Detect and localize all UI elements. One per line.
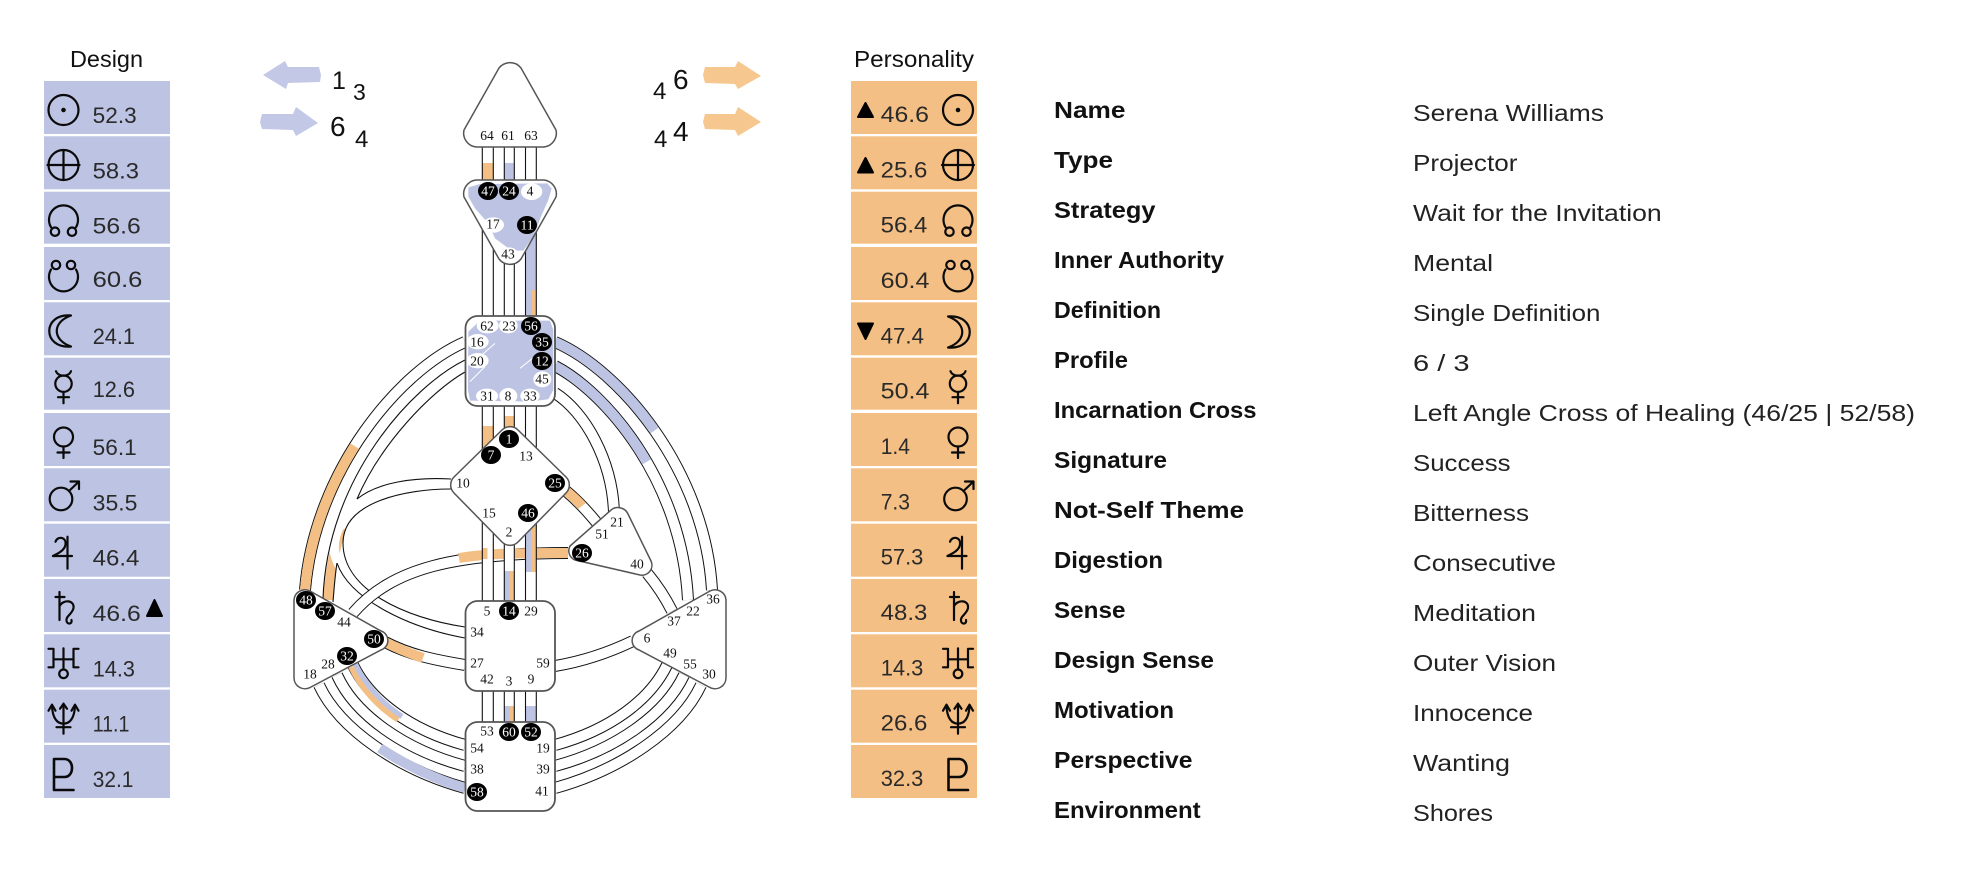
property: Sense <box>1054 597 1536 626</box>
property: Perspective: Wanting <box>1413 750 1510 776</box>
center: solar plexus: 36 <box>706 592 720 606</box>
center: root: 19 <box>536 740 550 756</box>
panel: personality column <box>851 46 977 798</box>
center: throat: 12 <box>535 354 549 368</box>
center: ajna: 4 <box>527 184 534 198</box>
center: throat <box>466 316 555 406</box>
row: personality Venus 1.4: 1.4 <box>881 434 910 459</box>
variable numbers: 6 4: 6 <box>330 111 346 142</box>
center: g center: 2 <box>506 524 512 540</box>
property: Strategy <box>1054 197 1662 226</box>
property: Name <box>1054 97 1604 126</box>
center: spleen: 32 <box>340 648 354 664</box>
property: Inner Authority: Mental <box>1413 250 1493 276</box>
center: sacral: 59 <box>536 656 550 670</box>
center: spleen: 18 <box>303 666 317 682</box>
center: head: 61 <box>501 128 515 143</box>
center: root: 60 <box>502 724 516 740</box>
row: personality Mars 7.3 <box>851 468 977 521</box>
row: design Saturn 46.6 with exaltation triangle: 46.6 <box>93 601 141 626</box>
panel: chart properties <box>1054 97 1915 826</box>
center: sacral: 27 <box>470 656 484 670</box>
property: Design Sense: Outer Vision <box>1413 650 1556 676</box>
center: root <box>466 722 555 811</box>
center: throat: 35 <box>535 334 549 350</box>
center: ajna: 43 <box>501 246 515 262</box>
row: design Sun 52.3 <box>44 81 170 134</box>
property: Environment <box>1054 797 1493 826</box>
property: Name: Serena Williams <box>1413 100 1604 126</box>
property: Design Sense <box>1054 647 1556 676</box>
center: spleen: 48 <box>299 592 313 608</box>
center: spleen: 44 <box>337 614 351 630</box>
row: design Moon 24.1: 24.1 <box>93 324 135 349</box>
center: heart <box>569 508 652 575</box>
center: solar plexus: 30 <box>702 666 716 682</box>
property: Name: Name <box>1054 97 1126 123</box>
center: root: 58 <box>470 784 484 800</box>
center: sacral: 9 <box>528 672 535 686</box>
center: g center: 15 <box>482 506 496 520</box>
center: sacral: 5 <box>484 604 491 618</box>
property: Not-Self Theme: Bitterness <box>1413 500 1529 526</box>
center: throat: 45 <box>535 372 549 386</box>
property: Profile: Profile <box>1054 347 1128 373</box>
property: Signature: Signature <box>1054 447 1167 473</box>
center: sacral <box>466 601 555 691</box>
row: design Mercury 12.6: 12.6 <box>93 377 135 402</box>
channel fills: activated segments <box>305 342 712 788</box>
center: g center: 10 <box>456 476 470 490</box>
property: Sense: Sense <box>1054 597 1126 623</box>
property: Incarnation Cross: Left Angle Cross of Healing (46/25 | 52/58) <box>1413 400 1915 426</box>
variable numbers: 1 3: 1 <box>332 67 346 95</box>
row: personality Moon 47.4 with detriment triangle: 47.4 <box>881 323 924 348</box>
center: ajna: 17 <box>486 216 500 232</box>
center: root: 38 <box>470 762 484 776</box>
center: throat: 20 <box>470 354 484 368</box>
property: Design Sense: Design Sense <box>1054 647 1214 673</box>
center: sacral: 29 <box>524 604 538 618</box>
row: personality Saturn 48.3: 48.3 <box>881 600 927 625</box>
center: solar plexus: 6 <box>644 630 651 646</box>
panel: design column <box>44 46 170 798</box>
property: Motivation: Innocence <box>1413 700 1533 726</box>
row: design Uranus 14.3 <box>44 634 170 687</box>
row: design Venus 56.1 <box>44 413 170 466</box>
row: personality Mercury 50.4: 50.4 <box>881 379 929 404</box>
property: Definition: Single Definition <box>1413 300 1600 326</box>
row: design Jupiter 46.4 <box>44 524 170 577</box>
center: throat: 8 <box>505 388 512 404</box>
center: g center <box>451 427 569 545</box>
row: design Moon 24.1 <box>44 302 170 355</box>
property: Environment: Shores <box>1413 800 1493 826</box>
property: Motivation <box>1054 697 1533 726</box>
arrow: blue left <box>263 61 321 89</box>
center: spleen: 57 <box>318 604 332 618</box>
center: g center: 25 <box>548 476 562 490</box>
center: root: 54 <box>470 740 484 756</box>
property: Strategy: Wait for the Invitation <box>1413 200 1662 226</box>
center: spleen <box>294 590 388 689</box>
center: solar plexus <box>632 590 726 689</box>
variables: design arrows and numbers <box>260 61 368 153</box>
property: Inner Authority: Inner Authority <box>1054 247 1224 273</box>
property: Digestion: Consecutive <box>1413 550 1556 576</box>
row: personality Moon 47.4 with detriment triangle <box>851 302 977 355</box>
row: design Saturn 46.6 with exaltation triangle <box>44 579 170 632</box>
arrow: orange lower <box>703 107 761 136</box>
row: personality Pluto 32.3 <box>851 745 977 798</box>
property: Inner Authority <box>1054 247 1493 276</box>
center: head: 64 <box>480 128 494 143</box>
property: Digestion <box>1054 547 1556 576</box>
center: heart: 21 <box>610 514 624 530</box>
property: Perspective <box>1054 747 1510 776</box>
heading: Design: Design <box>70 46 143 72</box>
row: personality Earth 25.6 <box>851 136 977 189</box>
property: Not-Self Theme: Not-Self Theme <box>1054 497 1244 523</box>
row: design Venus 56.1: 56.1 <box>93 435 137 460</box>
center: throat: 62 <box>480 318 494 334</box>
center: heart: 51 <box>595 526 609 542</box>
row: personality Jupiter 57.3: 57.3 <box>881 545 923 570</box>
row: design Mars 35.5 <box>44 468 170 521</box>
row: design Earth 58.3 <box>44 136 170 189</box>
row: design Pluto 32.1: 32.1 <box>93 767 133 792</box>
center: head <box>464 63 556 147</box>
center: spleen: 28 <box>321 656 335 672</box>
row: personality North Node 56.4: 56.4 <box>881 213 927 238</box>
property: Signature: Success <box>1413 450 1510 476</box>
center: g center: 1 <box>506 432 512 446</box>
property: Incarnation Cross: Incarnation Cross <box>1054 397 1256 423</box>
row: personality Pluto 32.3: 32.3 <box>881 766 923 791</box>
center: throat: 33 <box>523 388 537 404</box>
channels: curved tubes <box>305 342 712 788</box>
center: g center: 46 <box>521 506 535 520</box>
center: throat: 31 <box>480 388 494 404</box>
center: ajna: 11 <box>520 218 534 232</box>
center: spleen: 50 <box>367 632 381 646</box>
row: personality Mars 7.3: 7.3 <box>881 489 910 514</box>
channel: 10-34 loop merging with 20-57 <box>323 360 465 638</box>
variable numbers: 1 3: 3 <box>353 79 366 105</box>
center: root: 39 <box>536 762 550 776</box>
property: Strategy: Strategy <box>1054 197 1156 223</box>
center: heart: 26 <box>575 546 589 560</box>
center: ajna: 24 <box>502 184 516 198</box>
center: solar plexus: 37 <box>667 614 681 628</box>
variable numbers: 4 4: 4 <box>673 116 689 147</box>
property: Motivation: Motivation <box>1054 697 1174 723</box>
row: personality Jupiter 57.3 <box>851 524 977 577</box>
bodygraph chart <box>294 63 726 811</box>
center: g center: 13 <box>519 448 533 464</box>
property: Not-Self Theme <box>1054 497 1529 526</box>
row: design Earth 58.3: 58.3 <box>93 158 139 183</box>
center: solar plexus: 55 <box>683 656 697 672</box>
property: Type <box>1054 147 1518 176</box>
center: solar plexus: 22 <box>686 604 700 618</box>
center: ajna <box>464 180 556 264</box>
arrow: orange upper <box>703 61 761 89</box>
row: personality Neptune 26.6: 26.6 <box>881 711 927 736</box>
variable numbers: 4 6: 6 <box>673 64 689 95</box>
arrow: blue right <box>260 107 318 136</box>
property: Digestion: Digestion <box>1054 547 1163 573</box>
row: design Jupiter 46.4: 46.4 <box>93 546 139 571</box>
center: root: 41 <box>535 784 549 798</box>
row: personality South Node 60.4 <box>851 247 977 300</box>
row: personality Sun 46.6 <box>851 81 977 134</box>
center: g center: 7 <box>488 448 495 462</box>
row: personality Venus 1.4 <box>851 413 977 466</box>
property: Incarnation Cross <box>1054 397 1915 426</box>
center: sacral: 34 <box>470 624 484 640</box>
center: root: 52 <box>524 724 538 740</box>
channel: 44-26 <box>353 553 568 613</box>
row: personality Earth 25.6: 25.6 <box>881 157 927 182</box>
center: sacral: 3 <box>506 674 513 688</box>
variable numbers: 4 4: 4 <box>654 126 667 153</box>
row: design Neptune 11.1: 11.1 <box>93 712 129 737</box>
row: personality Sun 46.6: 46.6 <box>881 102 929 127</box>
center: solar plexus: 49 <box>663 646 677 660</box>
row: personality North Node 56.4 <box>851 192 977 244</box>
row: personality Neptune 26.6 <box>851 690 977 743</box>
center: sacral: 42 <box>480 672 494 686</box>
center: throat: 23 <box>502 318 516 334</box>
row: personality Uranus 14.3 <box>851 634 977 687</box>
row: personality Saturn 48.3 <box>851 579 977 632</box>
row: design Pluto 32.1 <box>44 745 170 798</box>
center: throat: 56 <box>524 318 538 334</box>
center: head: 63 <box>524 128 538 143</box>
property: Sense: Meditation <box>1413 600 1536 626</box>
row: design Neptune 11.1 <box>44 690 170 743</box>
property: Definition <box>1054 297 1600 326</box>
row: design South Node 60.6 <box>44 247 170 300</box>
variable numbers: 4 6: 4 <box>653 78 666 105</box>
property: Signature <box>1054 447 1510 476</box>
property: Profile: 6 / 3 <box>1413 350 1470 376</box>
variable numbers: 6 4: 4 <box>355 126 368 153</box>
variables: personality arrows and numbers <box>653 61 761 153</box>
property: Environment: Environment <box>1054 797 1201 823</box>
center: sacral: 14 <box>502 604 516 618</box>
row: design Sun 52.3: 52.3 <box>93 103 137 128</box>
property: Type: Projector <box>1413 150 1518 176</box>
channels: vertical tubes <box>482 147 536 724</box>
row: design North Node 56.6: 56.6 <box>93 214 141 239</box>
row: personality Uranus 14.3: 14.3 <box>881 655 923 680</box>
center: heart: 40 <box>630 556 644 572</box>
row: design Mars 35.5: 35.5 <box>93 490 137 515</box>
property: Perspective: Perspective <box>1054 747 1192 773</box>
center: ajna: 47 <box>481 184 495 198</box>
row: personality Mercury 50.4 <box>851 358 977 410</box>
row: design South Node 60.6: 60.6 <box>93 267 142 292</box>
heading: Personality: Personality <box>854 46 975 72</box>
property: Definition: Definition <box>1054 297 1161 323</box>
property: Type: Type <box>1054 147 1113 173</box>
row: design Mercury 12.6 <box>44 358 170 410</box>
row: design Uranus 14.3: 14.3 <box>93 656 135 681</box>
center: root: 53 <box>480 724 494 738</box>
row: personality South Node 60.4: 60.4 <box>881 268 929 293</box>
center: throat: 16 <box>470 334 484 350</box>
row: design North Node 56.6 <box>44 192 170 244</box>
property: Profile <box>1054 347 1470 376</box>
